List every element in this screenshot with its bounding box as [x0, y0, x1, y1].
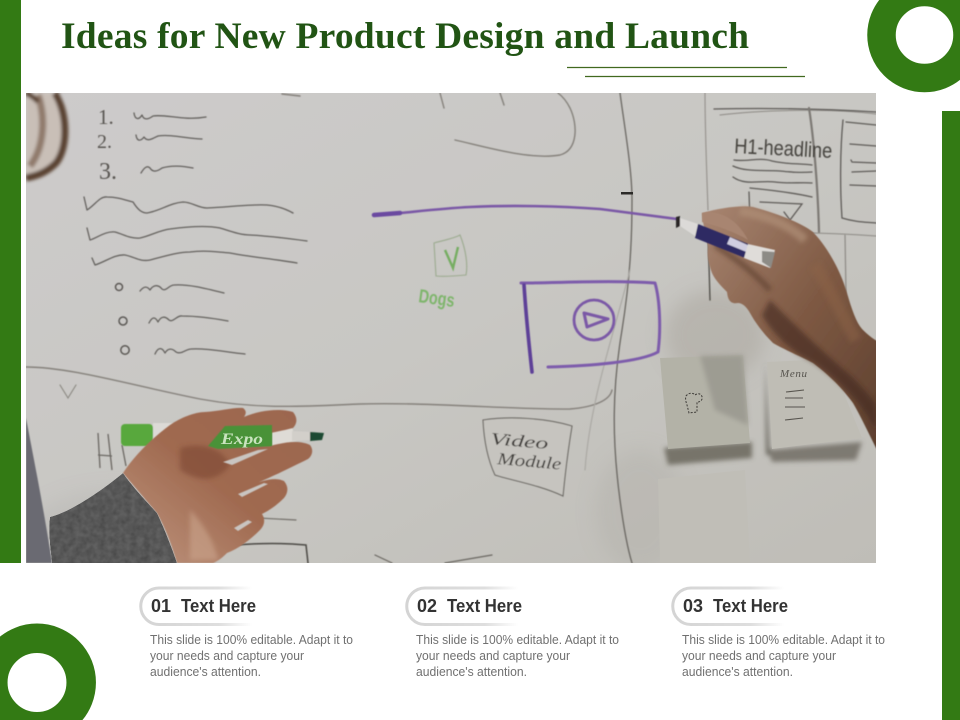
pill heading 01: 01: [151, 596, 171, 616]
pill heading 03: Text Here: [713, 596, 788, 616]
body text 01: [150, 632, 353, 679]
video module note: Module: [495, 449, 563, 474]
pill heading 01: [141, 588, 256, 624]
body text 03: This slide is 100% editable. Adapt it to: [682, 632, 885, 647]
body text 02: This slide is 100% editable. Adapt it to: [416, 632, 619, 647]
blurred sketch near left hand: [98, 433, 126, 470]
hair at top left: [26, 93, 67, 180]
left hand: Expo: [220, 431, 263, 448]
whiteboard surface: [26, 93, 876, 563]
marker tick on board: [621, 192, 633, 194]
item 02: [407, 588, 619, 679]
body text 02: your needs and capture your: [416, 648, 571, 663]
body text 03: [682, 632, 885, 679]
title underline: [567, 68, 805, 76]
bottom-left green ring: [0, 638, 81, 720]
board handwriting: numbers: 2.: [97, 131, 112, 153]
pill heading 03: 03: [683, 596, 703, 616]
sticky notes: [660, 354, 864, 468]
left hand: [123, 408, 312, 563]
pill heading 03: [673, 588, 788, 624]
item 01: [141, 588, 353, 679]
pill heading 02: Text Here: [447, 596, 522, 616]
video module note: Video: [490, 429, 549, 453]
title: Ideas for New Product Design and Launch: [61, 16, 749, 57]
purple marker in right hand: [676, 216, 775, 268]
marker label over fingers: [208, 425, 272, 449]
body text 01: This slide is 100% editable. Adapt it to: [150, 632, 353, 647]
sleeve: [49, 473, 177, 563]
item 03: [673, 588, 885, 679]
top-right green ring: [882, 0, 960, 78]
body text 03: your needs and capture your: [682, 648, 837, 663]
green marker in left hand: [121, 423, 324, 447]
right green bar: [942, 111, 960, 720]
right hand shape: [702, 206, 877, 450]
board handwriting: numbers: 1.: [98, 105, 114, 129]
dark edge of person at left: [26, 418, 52, 563]
purple marker drawing: [374, 206, 677, 372]
board handwriting: numbers: [97, 110, 116, 180]
body text 01: your needs and capture your: [150, 648, 305, 663]
pill heading 02: [407, 588, 522, 624]
board handwriting: numbers: 3.: [99, 159, 117, 185]
board handwriting: list: [84, 113, 307, 354]
pill heading 02: 02: [417, 596, 437, 616]
left green bar: [0, 0, 21, 563]
body text 01: audience's attention.: [150, 664, 261, 679]
gaps between fingers: [223, 449, 268, 531]
green sketch: V box and Dogs: [417, 235, 467, 312]
sticky note shadows: [664, 362, 862, 465]
video module note: [483, 418, 572, 496]
body text 02: [416, 632, 619, 679]
H1-headline sketch label: H1-headline: [734, 135, 833, 163]
green sketch: V box and Dogs: Dogs: [417, 286, 456, 312]
photo: whiteboard with hands: [26, 93, 877, 570]
body text 03: audience's attention.: [682, 664, 793, 679]
right hand holding marker: [676, 206, 877, 450]
body text 02: audience's attention.: [416, 664, 527, 679]
board handwriting: bullets: [116, 284, 129, 354]
board long sketch lines: [26, 93, 876, 563]
pill heading 01: Text Here: [181, 596, 256, 616]
soft shadows on board: [48, 289, 765, 536]
wireframe sketch, top right: [708, 108, 876, 236]
sticky notes: Menu: [779, 368, 808, 380]
